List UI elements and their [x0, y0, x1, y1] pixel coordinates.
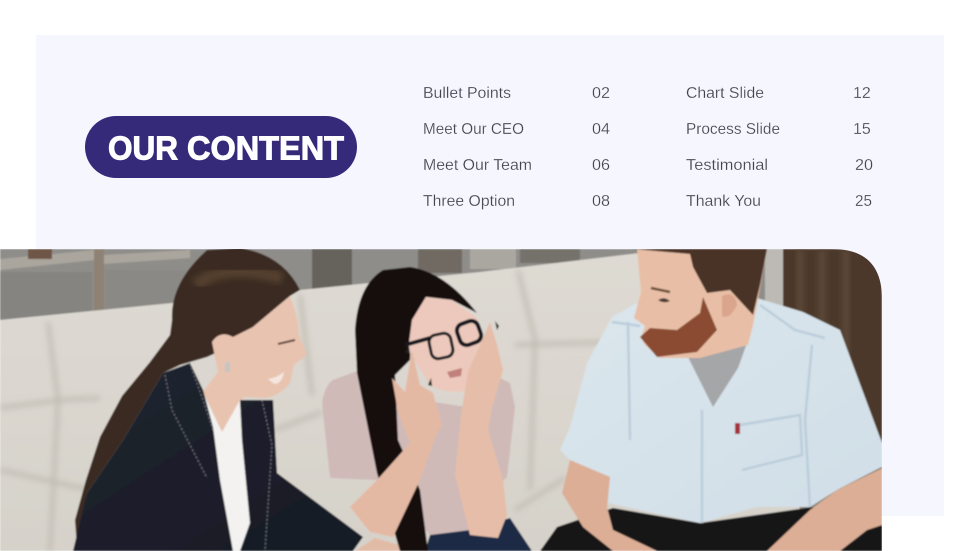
contents list: right column: Chart Slide — [686, 85, 764, 102]
right arm and hand — [455, 322, 507, 538]
contents list: right column: 12 — [853, 85, 871, 102]
man right — [540, 249, 882, 551]
woman centre — [322, 267, 532, 551]
glasses — [405, 319, 483, 360]
title pill: our content: CONTENT — [187, 130, 344, 166]
contents list: right column: 20 — [855, 157, 873, 174]
long black hair — [355, 267, 477, 551]
contents list: right column — [686, 85, 873, 210]
contents list: left column: Three Option — [423, 193, 515, 210]
trousers — [540, 506, 814, 551]
ear, eye, brow — [722, 294, 737, 317]
contents list: left column: 08 — [592, 193, 610, 210]
contents list: left column: 04 — [592, 121, 610, 138]
contents list: left column — [423, 85, 610, 210]
face and neck — [203, 296, 307, 440]
grey t-shirt — [687, 343, 747, 407]
beard — [640, 297, 717, 357]
face — [408, 297, 483, 392]
contents list: right column: Process Slide — [686, 121, 780, 138]
photo: three people on a sofa — [0, 248, 882, 551]
forearms — [562, 460, 657, 551]
woman left — [73, 248, 420, 551]
pink t-shirt — [322, 370, 515, 535]
contents list: left column: Bullet Points — [423, 85, 511, 102]
black blazer — [73, 363, 363, 551]
contents list: left column: 02 — [592, 85, 610, 102]
left arm and hand — [350, 350, 442, 537]
title pill: our content — [85, 116, 357, 178]
contents list: left column: Meet Our CEO — [423, 121, 524, 138]
room background with shelves — [0, 249, 882, 551]
contents list: right column: Thank You — [686, 193, 761, 210]
contents list: left column: Meet Our Team — [423, 157, 532, 174]
sofa — [0, 253, 840, 551]
contents list: right column: 25 — [855, 193, 872, 210]
contents list: right column: Testimonial — [686, 157, 768, 174]
hair — [633, 249, 767, 315]
white shirt — [204, 399, 251, 551]
contents list: left column: 06 — [592, 157, 610, 174]
neck, head — [634, 249, 767, 358]
contents list: right column: 15 — [853, 121, 871, 138]
jeans — [425, 518, 532, 551]
title pill: our content: OUR — [108, 130, 178, 166]
light blue shirt — [560, 298, 882, 523]
ponytail and hair — [75, 248, 300, 548]
